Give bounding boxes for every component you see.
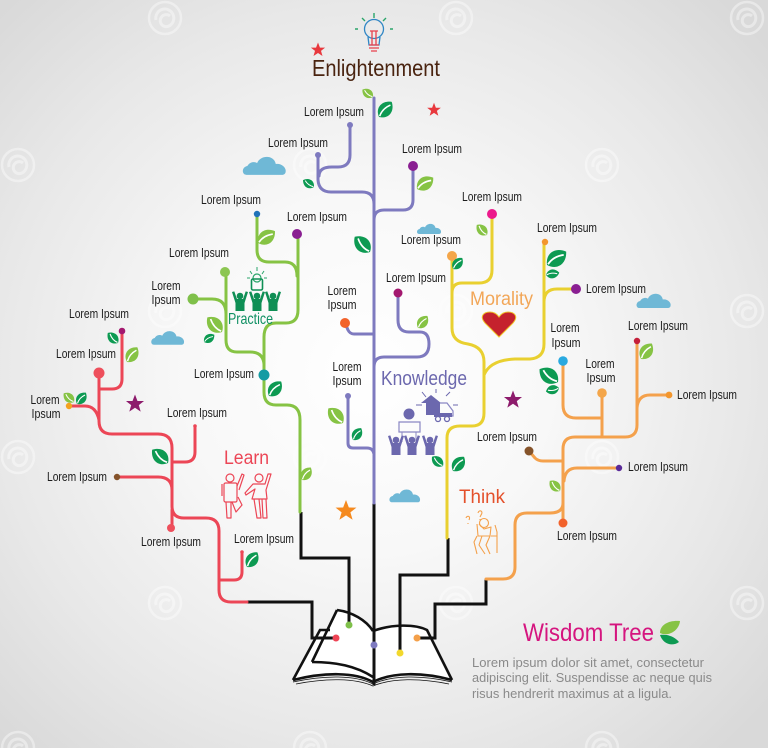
black roots (247, 503, 486, 685)
icon: light bulb (355, 13, 393, 51)
branches: purple knowledge (315, 98, 429, 503)
branch labels: Lorem (332, 360, 362, 374)
branches: red learn (66, 328, 247, 602)
branch labels: Lorem Ipsum (402, 142, 462, 156)
branch labels: Lorem Ipsum (537, 221, 597, 235)
branch labels (30, 105, 737, 549)
branch labels: Lorem Ipsum (462, 190, 522, 204)
branch labels: Lorem Ipsum (557, 529, 617, 543)
branch labels: Lorem Ipsum (167, 406, 227, 420)
heading: Wisdom Tree: Wisdom Tree (523, 619, 654, 647)
branch labels: Lorem Ipsum (141, 535, 201, 549)
branch labels: Lorem Ipsum (169, 246, 229, 260)
leaves (61, 86, 657, 570)
text block: description: Lorem ipsum dolor sit amet, consectetur (472, 656, 704, 670)
branch labels: Lorem Ipsum (201, 193, 261, 207)
icon: practice lock and people (232, 267, 281, 311)
branch labels: Lorem Ipsum (628, 319, 688, 333)
icon: wisdom tree leaves (660, 621, 680, 644)
root dots (332, 622, 420, 656)
branch labels: Lorem Ipsum (268, 136, 328, 150)
branch labels: Lorem (586, 357, 614, 371)
branch labels: Lorem Ipsum (56, 347, 116, 361)
branch labels: Lorem (550, 321, 580, 335)
branch labels: Ipsum (328, 298, 356, 312)
branch labels: Ipsum (32, 407, 60, 421)
branch labels: Ipsum (586, 371, 616, 385)
branch labels: Lorem Ipsum (234, 532, 294, 546)
branch labels: Ipsum (552, 336, 580, 350)
heading: Practice: Practice (228, 311, 273, 328)
text block: description (472, 656, 712, 701)
title: Enlightenment: Enlightenment (312, 55, 441, 81)
stars (126, 42, 522, 520)
text block: description: adipiscing elit. Suspendisse ac neque quis (472, 671, 712, 685)
branch labels: Lorem Ipsum (194, 367, 254, 381)
branch labels: Lorem (328, 284, 356, 298)
branch labels: Lorem Ipsum (386, 271, 446, 285)
branch labels: Lorem Ipsum (628, 460, 688, 474)
branch labels: Lorem (152, 279, 180, 293)
branch labels: Lorem Ipsum (477, 430, 537, 444)
heading: Think: Think (459, 487, 505, 508)
branch labels: Lorem Ipsum (586, 282, 646, 296)
icon: heart (482, 312, 516, 337)
branches: green practice (188, 211, 302, 512)
icon: thinking person (466, 511, 497, 554)
heading: Morality: Morality (470, 289, 533, 310)
branch labels: Lorem Ipsum (47, 470, 107, 484)
branch labels: Lorem Ipsum (401, 233, 461, 247)
branch labels: Ipsum (152, 293, 180, 307)
clouds (151, 157, 671, 502)
heading: Knowledge: Knowledge (381, 368, 467, 390)
branch labels: Lorem Ipsum (304, 105, 364, 119)
branch labels: Lorem (30, 393, 60, 407)
branch labels: Ipsum (332, 374, 362, 388)
branch labels: Lorem Ipsum (69, 307, 129, 321)
heading: Learn: Learn (224, 448, 269, 469)
icon: teacher with house and truck (388, 389, 458, 455)
branches: yellow morality (447, 209, 581, 538)
icon: learn students (222, 474, 271, 518)
book (293, 610, 452, 686)
text block: description: risus hendrerit maximus at a ligula. (472, 687, 672, 701)
branch labels: Lorem Ipsum (287, 210, 347, 224)
branches: orange think (486, 338, 672, 579)
branch labels: Lorem Ipsum (677, 388, 737, 402)
